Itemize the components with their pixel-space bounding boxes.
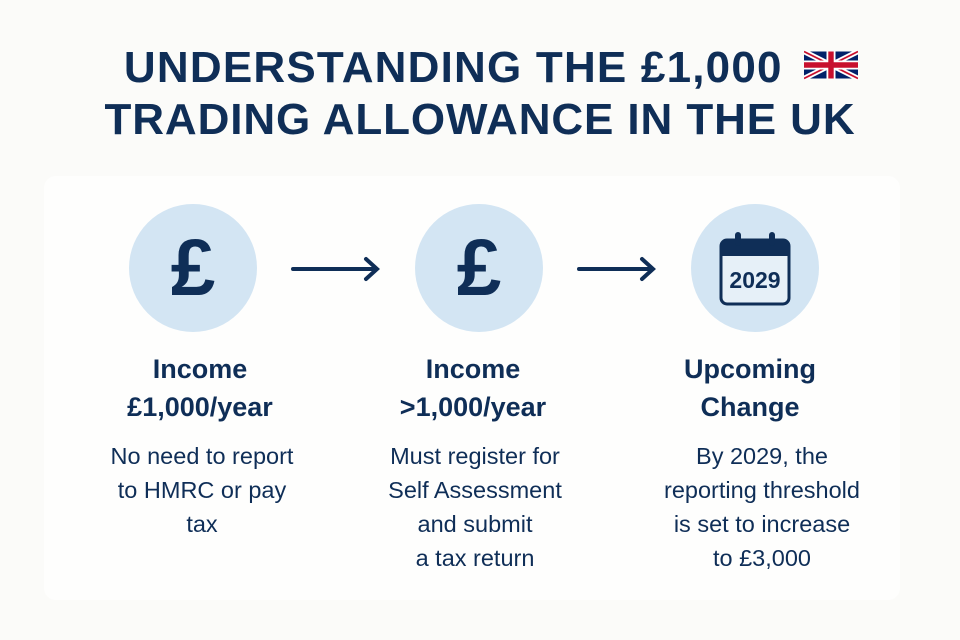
title: TRADING ALLOWANCE IN THE UK — [104, 95, 856, 144]
text 3: By 2029, the — [696, 443, 828, 469]
heading 3 — [684, 354, 816, 422]
heading 3: Upcoming — [684, 354, 816, 384]
title: UNDERSTANDING THE £1,000 — [124, 43, 783, 92]
text 2: Self Assessment — [388, 477, 562, 503]
text 1: No need to report — [111, 443, 293, 469]
text 3 — [664, 443, 860, 571]
heading 1 — [127, 354, 273, 422]
icon: calendar circle: 2029 — [729, 267, 781, 293]
heading 3: Change — [700, 392, 800, 422]
icon: pound circle 2 — [415, 204, 543, 332]
icon: calendar circle — [691, 204, 819, 332]
heading 2: Income — [426, 354, 520, 384]
text 3: to £3,000 — [713, 545, 811, 571]
icon: pound circle 2: £ — [457, 223, 501, 312]
text 1: tax — [186, 511, 218, 537]
text 1 — [111, 443, 294, 537]
text 1: to HMRC or pay — [118, 477, 286, 503]
icon: UK flag — [804, 50, 858, 80]
panel: card background — [44, 176, 900, 600]
heading 1: Income — [153, 354, 247, 384]
icon: pound circle 1: £ — [171, 223, 215, 312]
text 2: a tax return — [416, 545, 534, 571]
heading 1: £1,000/year — [127, 392, 273, 422]
text 2: Must register for — [390, 443, 560, 469]
title — [104, 43, 858, 144]
icon: pound circle 1 — [129, 204, 257, 332]
text 2 — [388, 443, 562, 571]
heading 2: >1,000/year — [400, 392, 546, 422]
text 2: and submit — [418, 511, 532, 537]
text 3: is set to increase — [674, 511, 850, 537]
text 3: reporting threshold — [664, 477, 860, 503]
arrow 2 — [577, 256, 656, 282]
heading 2 — [400, 354, 546, 422]
arrow 1 — [291, 256, 380, 282]
